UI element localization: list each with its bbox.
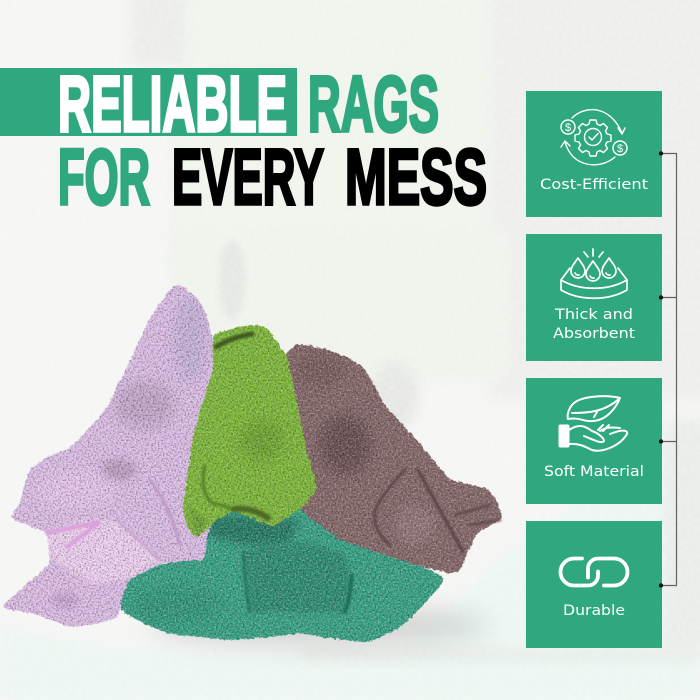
title word: RELIABLE: RELIABLE xyxy=(58,59,287,148)
pile of rags xyxy=(1,284,503,642)
card: Durable xyxy=(526,521,662,648)
icon: hand and leaf xyxy=(560,396,627,451)
title word: RAGS: RAGS xyxy=(308,59,439,148)
label: Thick and xyxy=(554,307,633,323)
title word: MESS: MESS xyxy=(345,132,487,221)
icon: gear with coins xyxy=(561,110,627,165)
connector lines xyxy=(661,154,676,586)
card: Cost-Efficient: $ xyxy=(565,122,571,134)
rag: teal xyxy=(120,502,445,642)
label: Cost-Efficient xyxy=(540,177,648,193)
ground shadow under rags xyxy=(150,606,490,646)
title xyxy=(58,59,487,221)
label: Durable xyxy=(563,603,625,619)
card: Thick and Absorbent xyxy=(526,234,662,361)
connector dot xyxy=(659,295,663,300)
icon: chain links xyxy=(560,558,628,586)
rag: brown xyxy=(280,344,503,573)
label: Soft Material xyxy=(544,464,644,480)
title band xyxy=(0,68,297,136)
title word: FOR: FOR xyxy=(58,132,150,221)
card: Soft Material xyxy=(526,378,662,504)
connector dot xyxy=(659,151,663,156)
card: Thick and Absorbent: Absorbent xyxy=(553,326,635,342)
card: Cost-Efficient: $ xyxy=(617,143,623,155)
card: Cost-Efficient xyxy=(526,91,662,217)
title word: EVERY: EVERY xyxy=(172,132,324,221)
rag: green xyxy=(183,325,317,538)
connector dot xyxy=(659,439,663,444)
rag folds and creases xyxy=(47,334,500,612)
connector dot xyxy=(659,583,663,588)
icon: sponge with drops xyxy=(561,249,627,298)
rag: lilac xyxy=(1,284,225,627)
